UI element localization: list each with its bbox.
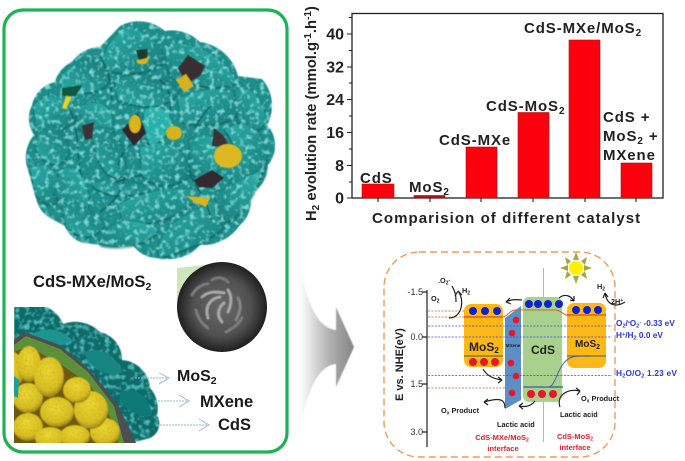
interface labels <box>475 432 593 453</box>
potential labels: 2 <box>641 374 645 380</box>
potential labels: / <box>626 318 629 328</box>
left MoS2 block: 2 <box>494 346 499 355</box>
y-axis title: H <box>304 210 320 221</box>
species labels: O <box>431 294 437 303</box>
potential labels: 2 <box>636 324 639 330</box>
heading: catalyst name: 2 <box>145 281 151 293</box>
energy axis: 3.0 <box>410 427 423 437</box>
potential labels: 1.23 eV <box>645 368 677 378</box>
species labels: 2 <box>437 298 440 304</box>
potential labels: 2 <box>622 374 625 380</box>
CdS block: CdS <box>531 343 555 357</box>
interface labels: CdS-MXe/MoS <box>475 433 526 442</box>
y-axis numbers: 8 <box>335 158 344 175</box>
label arrows and layer labels: 2 <box>211 375 217 387</box>
species labels: Lactic acid <box>497 420 535 429</box>
bar labels: + <box>644 128 659 145</box>
potential labels: O/O <box>625 368 642 378</box>
label arrows and layer labels: MoS <box>177 368 211 385</box>
potential labels: O <box>630 318 637 328</box>
y-axis numbers <box>326 26 344 208</box>
right MoS2 block <box>567 303 606 368</box>
potential labels <box>616 318 677 380</box>
species labels: Lactic acid <box>560 410 598 419</box>
right MoS2 block: 2 <box>596 344 600 351</box>
bar labels: 2 <box>559 106 565 117</box>
potential labels: O <box>616 318 622 328</box>
species labels: 2H <box>611 297 620 306</box>
potential labels: 2 <box>622 324 626 330</box>
potential labels: H <box>616 330 622 340</box>
y-axis numbers: 16 <box>326 125 344 142</box>
CdS-MoS2 divider <box>542 268 544 442</box>
CdS block <box>523 297 563 402</box>
species labels <box>431 276 623 429</box>
species labels: Product <box>589 394 620 403</box>
illustration: cross-section with layers <box>14 307 160 443</box>
y-axis title: ) <box>304 6 320 11</box>
y-axis numbers: 40 <box>326 26 344 44</box>
bar labels: CdS <box>360 170 393 187</box>
species labels: H <box>462 286 467 295</box>
left MoS2 block: MoS <box>469 340 494 354</box>
potential labels: - <box>639 320 641 326</box>
inset: SEM image <box>177 262 267 352</box>
y-axis title: -1 <box>303 33 314 42</box>
right MoS2 block: MoS <box>575 339 596 350</box>
species labels: H <box>597 282 602 291</box>
species labels: O <box>441 406 447 415</box>
panel: catalyst structure <box>4 10 287 452</box>
energy axis: 0.0 <box>410 332 423 342</box>
interface labels: interface <box>559 443 591 452</box>
bar labels: MoS <box>409 179 443 196</box>
y-axis title: evolution rate (mmol.g <box>304 42 320 205</box>
x-axis title: Comparision of different catalyst <box>372 210 641 227</box>
y-axis title: .h <box>304 20 320 33</box>
species labels: O <box>581 394 587 403</box>
illustration: CdS-MXe/MoS2 nanoflower sphere <box>26 21 275 259</box>
species labels: 2 <box>446 280 449 286</box>
potential labels: + <box>622 332 625 338</box>
panel: band diagram <box>384 252 677 457</box>
potential labels: H <box>616 368 622 378</box>
process arrows <box>449 286 625 409</box>
potential labels: /H <box>625 330 634 340</box>
species labels: 2 <box>467 290 470 296</box>
interface labels: interface <box>487 444 519 453</box>
potential labels: 2 <box>634 336 637 342</box>
MXene sheet: MXene <box>506 343 521 348</box>
petal creases <box>70 55 215 222</box>
bar labels: 2 <box>637 136 644 147</box>
y-axis numbers: 24 <box>326 92 344 109</box>
interface labels: CdS-MoS <box>557 432 590 441</box>
species labels: x <box>587 398 590 404</box>
CdS spheres <box>14 345 120 443</box>
bar labels: MoS <box>603 128 637 145</box>
left MoS2 block <box>464 304 503 367</box>
label arrows and layer labels: CdS <box>218 416 251 434</box>
bar labels: CdS-MXe <box>439 132 511 149</box>
interface labels: 2 <box>526 438 529 444</box>
label arrows and layer labels: MXene <box>200 393 253 411</box>
energy axis: E vs. NHE(eV) <box>394 328 406 401</box>
species labels: - <box>448 278 450 284</box>
potential labels: • <box>628 320 630 326</box>
plot frame <box>352 14 663 198</box>
bar labels <box>360 20 659 198</box>
label arrows and layer labels <box>135 368 253 434</box>
bar labels: 2 <box>443 187 450 198</box>
heading: catalyst name: CdS-MXe/MoS <box>33 272 145 291</box>
species labels: + <box>620 298 623 304</box>
potential labels: 0.0 eV <box>637 330 663 340</box>
potential reference lines <box>428 311 612 388</box>
bars <box>362 40 652 198</box>
energy axis: 1.5 <box>410 379 423 389</box>
icon: sun <box>560 252 592 284</box>
arrow: from structure to results <box>300 262 354 432</box>
species labels: .O <box>438 276 446 285</box>
y-axis title: 2 <box>311 204 322 210</box>
species labels: Product <box>449 406 480 415</box>
bar labels: 2 <box>636 28 642 39</box>
bar labels: CdS + <box>603 109 650 126</box>
bar labels: CdS-MXe/MoS <box>524 20 636 37</box>
species labels: 2 <box>602 286 605 292</box>
y-axis title: -1 <box>303 11 314 20</box>
MXene sheet <box>505 306 521 409</box>
y-axis numbers: 0 <box>335 190 344 208</box>
bar labels: MXene <box>603 147 656 164</box>
energy axis: -1.5 <box>407 287 423 297</box>
interface labels: 2 <box>590 436 593 442</box>
species labels: x <box>447 410 450 416</box>
potential labels: -0.33 eV <box>641 318 675 328</box>
y-axis numbers: 32 <box>326 60 344 76</box>
bar labels: CdS-MoS <box>486 98 559 115</box>
core: yellow CdS and dark MXene peeking through <box>62 49 242 207</box>
energy axis <box>394 287 427 447</box>
bar chart: H2 evolution rate <box>303 6 663 227</box>
